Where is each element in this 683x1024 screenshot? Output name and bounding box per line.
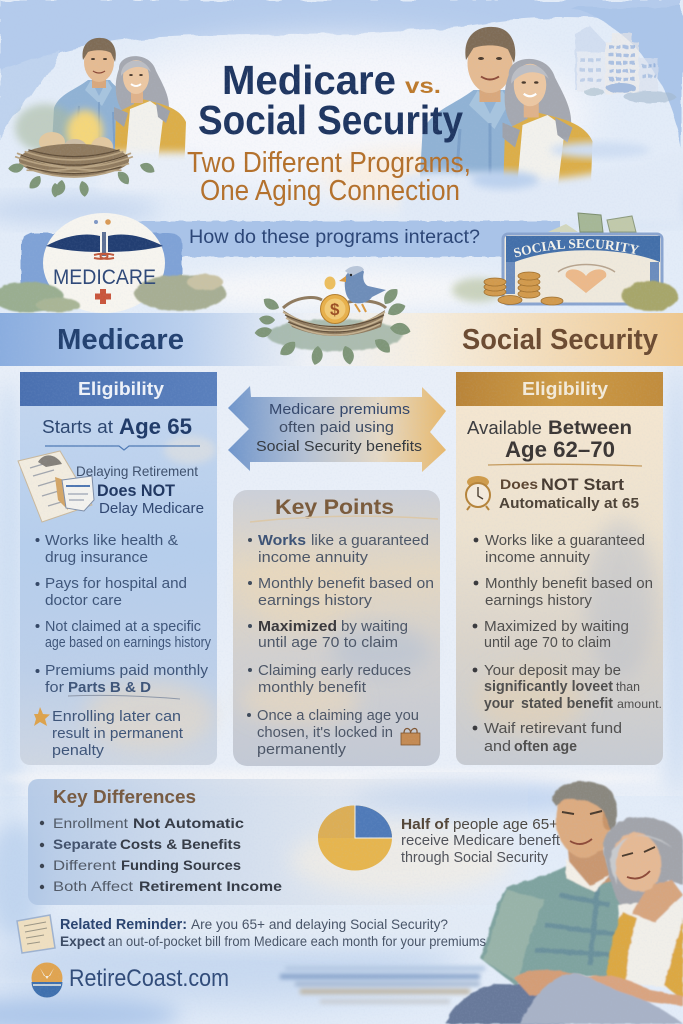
bullet list: Parts B & D [68, 679, 151, 696]
section band [0, 313, 683, 366]
bullet list: income annuity [485, 549, 591, 566]
icon: reminder notice [17, 915, 55, 953]
bullet list: amount. [617, 697, 662, 711]
title [198, 57, 463, 143]
bullet list: monthly benefit [258, 679, 367, 696]
bullet list: permanently [257, 741, 347, 758]
woman face [622, 847, 655, 879]
reminder block: Related Reminder: [60, 917, 187, 933]
bullet list: significantly loveet [484, 678, 613, 695]
callout: pie caption: people age 65+ [453, 816, 558, 833]
callout: delaying retirement: Does NOT [97, 481, 176, 500]
bullet list: Maximized by waiting [484, 618, 629, 635]
callout: does not start [499, 475, 639, 512]
panel: medicare eligibility [18, 372, 217, 765]
social security card [449, 212, 680, 312]
bullet list: doctor care [45, 592, 122, 609]
bullet list [473, 532, 662, 755]
bullet list: Funding Sources [121, 857, 241, 873]
bullet list: Claiming early reduces [258, 662, 411, 679]
panel: key points [233, 490, 440, 766]
reminder block: Are you 65+ and delaying Social Security? [191, 916, 448, 932]
subtitle [187, 147, 471, 207]
subtitle: Two Different Programs, [187, 147, 471, 179]
bullet list: Works [258, 532, 306, 549]
bullet list: Your deposit may be [484, 662, 621, 679]
callout: pie caption [401, 816, 561, 866]
bullet list: for [45, 679, 64, 696]
callout: pie caption: receive Medicare beneft [401, 832, 561, 849]
bullet list: Costs & Benefits [120, 836, 241, 852]
callout: enrolling penalty [52, 708, 184, 759]
bullet list: income annuity [258, 549, 369, 566]
bullet list: like a guaranteed [311, 532, 429, 549]
title: Social Security [198, 97, 463, 143]
icon: alarm clock [466, 476, 490, 510]
bullet list: Not Automatic [133, 815, 244, 831]
bullet list: Waif retirevant fund [484, 720, 622, 737]
reminder block: an out-of-pocket bill from Medicare each month for your premiums [108, 933, 486, 949]
panel header: Eligibility [78, 379, 164, 399]
title: vs. [405, 75, 441, 98]
panel header [20, 372, 217, 406]
bullet list: until age 70 to claim [258, 634, 398, 651]
bullet list: and [484, 738, 511, 755]
icon: gift box [401, 728, 420, 745]
logo: RetireCoast.com [32, 962, 229, 997]
age heading [42, 414, 192, 439]
bullet list: Enrollment [53, 815, 128, 831]
bullet list: Monthly benefit based on [258, 575, 434, 592]
arrow text: Social Security benefits [256, 439, 422, 455]
bullet list: Pays for hospital and [45, 575, 187, 592]
callout: pie caption: through Social Security [401, 849, 548, 866]
section heading: medicare: Medicare [57, 324, 184, 356]
bullet list: drug insurance [45, 549, 148, 566]
bullet list: Not claimed at a specific [45, 618, 201, 635]
callout: enrolling penalty: Enrolling later can [52, 708, 181, 725]
man [446, 781, 632, 1024]
panel: social security eligibility [456, 372, 663, 765]
logo mark [32, 962, 62, 997]
bullet list: Both Affect [53, 878, 133, 894]
arrow text [256, 402, 422, 455]
bullet list: your [484, 695, 514, 712]
callout: pie caption: Half of [401, 816, 450, 833]
bullet list: Monthly benefit based on [485, 575, 653, 592]
title: Medicare [222, 57, 396, 103]
panel heading: Key Differences [53, 787, 196, 807]
pie chart: half of people 65+ [318, 805, 392, 870]
callout: enrolling penalty: penalty [52, 742, 105, 759]
arrow text: often paid using [279, 420, 394, 436]
bullet list: Works like a guaranteed [485, 532, 645, 549]
age heading [467, 418, 632, 462]
callout: does not start: Automatically at 65 [499, 496, 639, 512]
callout: enrolling penalty: result in permanent [52, 725, 184, 742]
social security card: SOCIAL SECURITY [514, 239, 640, 258]
bullet list: earnings history [485, 592, 593, 609]
illustration: center nest with bird [254, 266, 412, 366]
bullet list: Maximized [258, 618, 337, 635]
age heading: Available [467, 418, 542, 438]
question banner [135, 221, 560, 257]
illustration: center nest with bird: $ [330, 300, 340, 319]
woman [520, 817, 683, 1024]
medicare badge: MEDICARE [53, 266, 156, 289]
illustration: bottom-right couple [446, 781, 683, 1024]
arrows: premiums flow [228, 386, 446, 472]
bullet list: Works like health & [45, 532, 178, 549]
callout: does not start: NOT Start [541, 475, 624, 494]
illustration: top-right couple [400, 27, 683, 225]
illustration: sea [280, 966, 485, 1004]
question banner: How do these programs interact? [189, 227, 480, 248]
panel: key differences [28, 779, 528, 905]
age heading: Starts at [42, 417, 113, 437]
bullet list: by waiting [341, 618, 408, 635]
bullet list [247, 532, 434, 758]
callout: delaying retirement: Delaying Retirement [76, 463, 198, 479]
bullet list [36, 532, 211, 699]
age heading: Between [548, 418, 632, 439]
illustration: top-left couple with nest [8, 38, 200, 197]
logo: RetireCoast.com: RetireCoast.com [69, 965, 229, 992]
man face [562, 811, 602, 844]
bullet list: than [616, 679, 640, 694]
panel header: Eligibility [522, 379, 608, 399]
panel header [456, 372, 663, 406]
subtitle: One Aging Connection [200, 175, 460, 207]
bullet list: chosen, it's locked in [257, 724, 393, 741]
bullet list: Once a claiming age you [257, 707, 419, 724]
icon: star [34, 707, 50, 726]
reminder block: Expect [60, 933, 105, 949]
age heading: Age 62–70 [505, 437, 615, 462]
bullet list: Premiums paid monthly [45, 662, 209, 679]
bullet list: stated benefit [521, 695, 613, 712]
illustration: top-right hospital building [575, 26, 676, 103]
bullet list: Retirement Income [139, 878, 282, 894]
bullet list: until age 70 to claim [484, 634, 611, 651]
icon: medical paperwork [18, 451, 94, 522]
age heading: Age 65 [119, 414, 192, 439]
callout: delaying retirement [76, 463, 204, 517]
bullet list: Separate [53, 836, 117, 852]
callout: does not start: Does [500, 476, 538, 492]
callout: delaying retirement: Delay Medicare [99, 500, 204, 517]
arrow text: Medicare premiums [269, 402, 410, 418]
panel heading: Key Points [275, 496, 394, 519]
bullet list: often age [514, 738, 577, 755]
reminder block [17, 915, 486, 953]
bullet list: earnings history [258, 592, 373, 609]
bullet list: age based on earnings history [45, 634, 211, 651]
medicare badge [0, 213, 226, 313]
bullet list: Different [53, 857, 116, 873]
bullet list [40, 815, 282, 894]
section heading: social security: Social Security [462, 324, 658, 356]
